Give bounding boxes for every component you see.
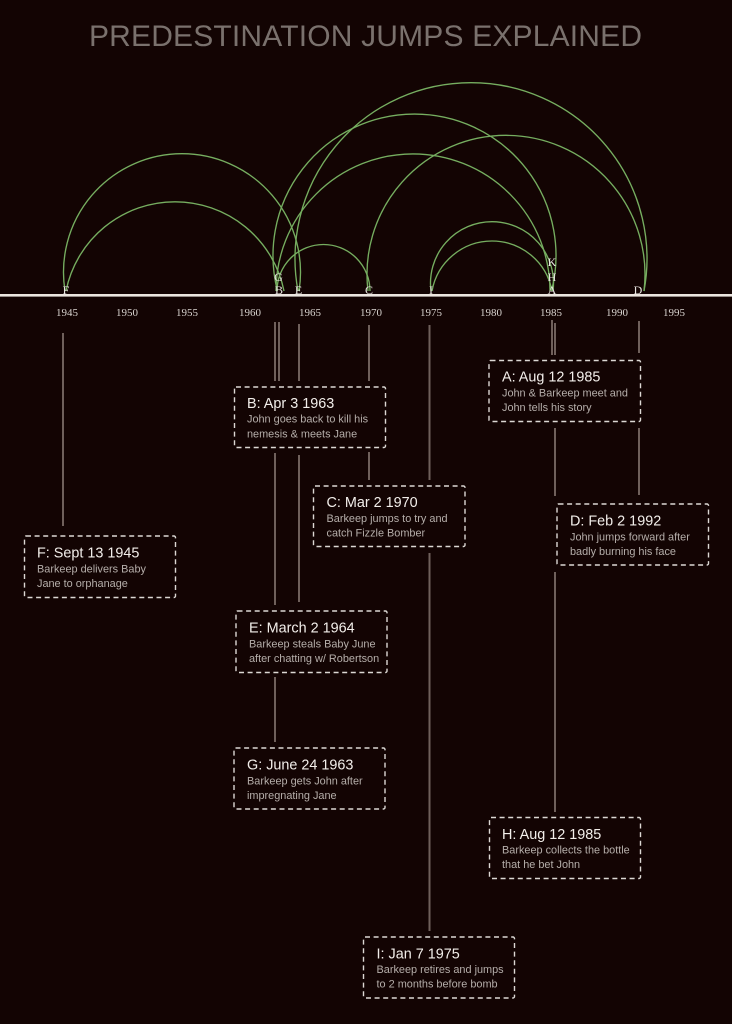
title: PREDESTINATION JUMPS EXPLAINED bbox=[89, 20, 642, 53]
panel: event E: E: March 2 1964 bbox=[249, 620, 355, 636]
event letters on timeline: A bbox=[548, 283, 557, 297]
year labels: 1990 bbox=[606, 307, 628, 319]
panel: event C: catch Fizzle Bomber bbox=[326, 528, 426, 540]
year labels: 1945 bbox=[56, 307, 78, 319]
event letters on timeline: F bbox=[63, 283, 70, 297]
panel: event D: D: Feb 2 1992 bbox=[570, 514, 661, 530]
event letters on timeline: E bbox=[295, 283, 302, 297]
panel: event C: Barkeep jumps to try and bbox=[326, 513, 448, 525]
year labels: 1970 bbox=[360, 307, 382, 319]
panel: event H: Barkeep collects the bottle bbox=[502, 844, 630, 856]
event letters on timeline: B bbox=[275, 283, 283, 297]
year labels: 1955 bbox=[176, 307, 198, 319]
event letters on timeline: D bbox=[634, 283, 643, 297]
panel: event D: badly burning his face bbox=[570, 546, 676, 558]
panel: event E: after chatting w/ Robertson bbox=[249, 653, 379, 665]
panel: event A: John tells his story bbox=[502, 402, 592, 414]
panel: event H bbox=[490, 818, 640, 878]
panel: event I: I: Jan 7 1975 bbox=[376, 946, 460, 962]
panel: event B: John goes back to kill his bbox=[247, 414, 369, 426]
panel: event B: B: Apr 3 1963 bbox=[247, 396, 334, 412]
panel: event H: that he bet John bbox=[502, 859, 580, 871]
year labels: 1965 bbox=[299, 307, 322, 319]
event letters on timeline: K bbox=[548, 255, 557, 269]
panel: event F: Jane to orphanage bbox=[37, 578, 128, 590]
year labels: 1975 bbox=[420, 307, 442, 319]
year labels: 1980 bbox=[480, 307, 502, 319]
panel: event B: nemesis & meets Jane bbox=[247, 428, 357, 440]
connector lines bbox=[63, 320, 639, 931]
panel: event G: impregnating Jane bbox=[247, 790, 337, 802]
panel: event I bbox=[364, 937, 514, 998]
timeline axis bbox=[0, 294, 732, 297]
year labels: 1985 bbox=[540, 307, 562, 319]
year labels: 1995 bbox=[663, 307, 686, 319]
panel: event A bbox=[489, 360, 640, 422]
panel: event B bbox=[234, 387, 386, 448]
event letters on timeline bbox=[63, 255, 643, 297]
panel: event F: F: Sept 13 1945 bbox=[37, 546, 139, 562]
panel: event A: John & Barkeep meet and bbox=[502, 388, 628, 400]
panel: event F: Barkeep delivers Baby bbox=[37, 564, 147, 576]
panel: event G: G: June 24 1963 bbox=[247, 758, 353, 774]
event letters on timeline: I bbox=[429, 283, 433, 297]
year labels: 1950 bbox=[116, 307, 138, 319]
panel: event C: C: Mar 2 1970 bbox=[326, 495, 418, 511]
panel: event G bbox=[234, 748, 385, 809]
event letters on timeline: C bbox=[365, 283, 373, 297]
event letters on timeline: G bbox=[274, 270, 283, 284]
panel: event G: Barkeep gets John after bbox=[247, 776, 363, 788]
panel: event I: to 2 months before bomb bbox=[376, 978, 498, 990]
panel: event C bbox=[314, 486, 465, 546]
panel: event A: A: Aug 12 1985 bbox=[502, 370, 600, 386]
year labels bbox=[56, 307, 686, 319]
panel: event I: Barkeep retires and jumps bbox=[376, 964, 504, 976]
panel: event E bbox=[236, 611, 387, 672]
panel: event D bbox=[557, 504, 708, 565]
panel: event D: John jumps forward after bbox=[570, 532, 690, 544]
year labels: 1960 bbox=[239, 307, 262, 319]
panel: event E: Barkeep steals Baby June bbox=[249, 638, 376, 650]
event letters on timeline: H bbox=[548, 270, 557, 284]
panel: event H: H: Aug 12 1985 bbox=[502, 827, 601, 843]
panel: event F bbox=[24, 536, 176, 598]
arc diagram of jumps bbox=[63, 83, 647, 291]
